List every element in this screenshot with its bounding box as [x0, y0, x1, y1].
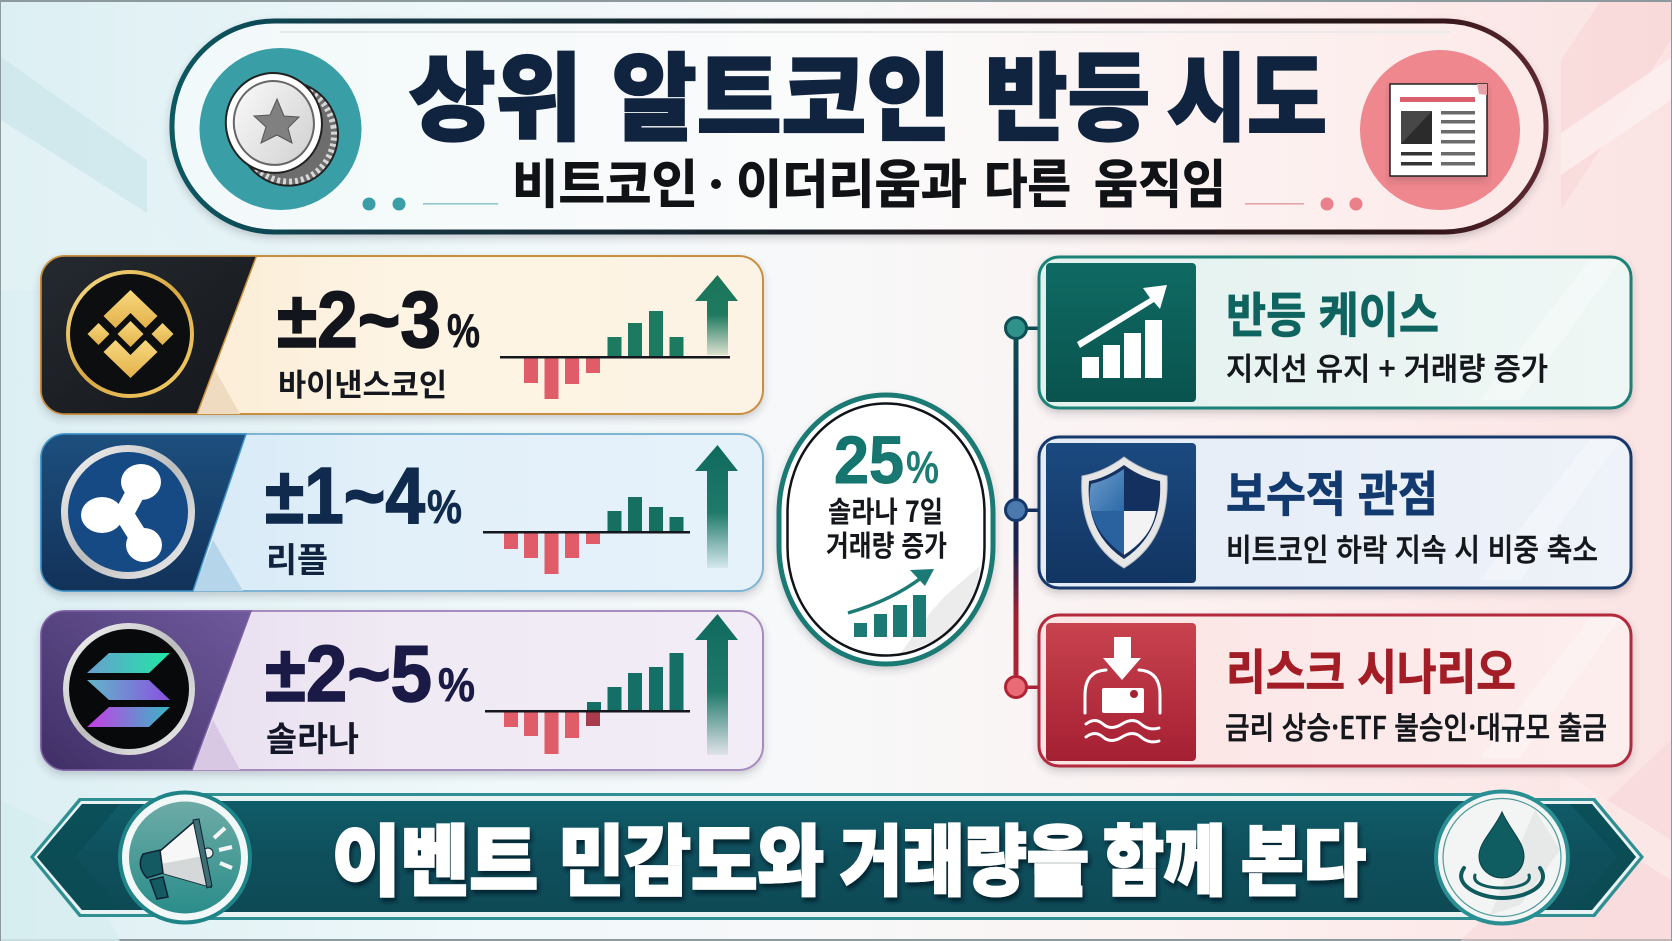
coin name: 솔라나	[266, 712, 359, 761]
icon: silver coin	[200, 48, 362, 210]
description: 비트코인 하락 지속 시 비중 축소	[1226, 525, 1598, 570]
connector line	[1006, 318, 1038, 698]
coin name: 리플	[266, 533, 328, 582]
icon: ripple coin	[61, 445, 195, 579]
decorative dots left	[362, 198, 498, 210]
icon: risk flood	[1046, 623, 1196, 761]
caption	[826, 489, 947, 565]
banner text: 거래량을	[840, 801, 1089, 912]
heading: 시도	[1167, 23, 1327, 160]
arrow up	[695, 445, 738, 568]
range value: ±1~4	[265, 451, 425, 540]
panel: 반등 케이스	[1039, 257, 1631, 408]
banner text: 이벤트	[332, 801, 538, 912]
icon: shield	[1046, 443, 1196, 583]
banner	[30, 790, 1644, 926]
heading	[409, 23, 1327, 160]
description: 금리 상승·ETF 불승인·대규모 출금	[1225, 703, 1607, 748]
icon: growth chart	[1046, 263, 1196, 402]
caption: 솔라나 7일	[828, 489, 943, 531]
caption: 거래량 증가	[826, 523, 947, 565]
range value: %	[447, 304, 480, 357]
subtitle: 움직임	[1094, 143, 1226, 218]
icon: newspaper	[1360, 50, 1520, 210]
subtitle: 비트코인	[512, 143, 698, 218]
description: 지지선 유지 + 거래량 증가	[1226, 344, 1548, 389]
heading: 반등 케이스	[1226, 276, 1439, 346]
banner text: 함께	[1103, 801, 1225, 912]
icon: water drop	[1434, 790, 1570, 926]
value: 25	[834, 423, 904, 498]
subtitle: 다른	[984, 143, 1071, 218]
banner text: 본다	[1241, 801, 1366, 912]
range value: %	[427, 480, 462, 533]
panel: 보수적 관점	[1039, 437, 1631, 588]
icon: binance coin	[66, 270, 194, 398]
coin name: 바이낸스코인	[278, 360, 447, 405]
icon: megaphone	[118, 790, 252, 924]
panel: 리플	[41, 434, 763, 591]
range value: ±2~3	[277, 275, 441, 364]
title panel	[172, 21, 1546, 232]
arrow up	[695, 614, 738, 755]
value: %	[906, 441, 939, 493]
subtitle: 이더리움과	[736, 143, 967, 218]
panel: 솔라나	[41, 611, 763, 770]
range value: %	[438, 658, 475, 711]
panel: 리스크 시나리오	[1039, 615, 1631, 766]
bar chart	[483, 497, 690, 574]
decorative dots right	[1245, 198, 1362, 210]
bar chart	[500, 311, 730, 399]
banner text: 민감도와	[558, 801, 824, 912]
callout: 25% badge	[779, 395, 993, 664]
arrow up	[695, 275, 738, 355]
heading: 보수적 관점	[1226, 455, 1438, 525]
heading: 리스크 시나리오	[1226, 633, 1516, 703]
heading: 반등	[985, 23, 1150, 160]
panel: 바이낸스코인	[41, 256, 763, 414]
banner text	[332, 801, 1366, 912]
subtitle	[512, 143, 1226, 218]
range value: ±2~5	[265, 629, 432, 718]
mini chart	[848, 569, 934, 637]
bar chart	[485, 653, 690, 754]
heading: 상위	[409, 23, 582, 160]
heading: 알트코인	[612, 23, 951, 160]
icon: solana coin	[63, 623, 195, 755]
